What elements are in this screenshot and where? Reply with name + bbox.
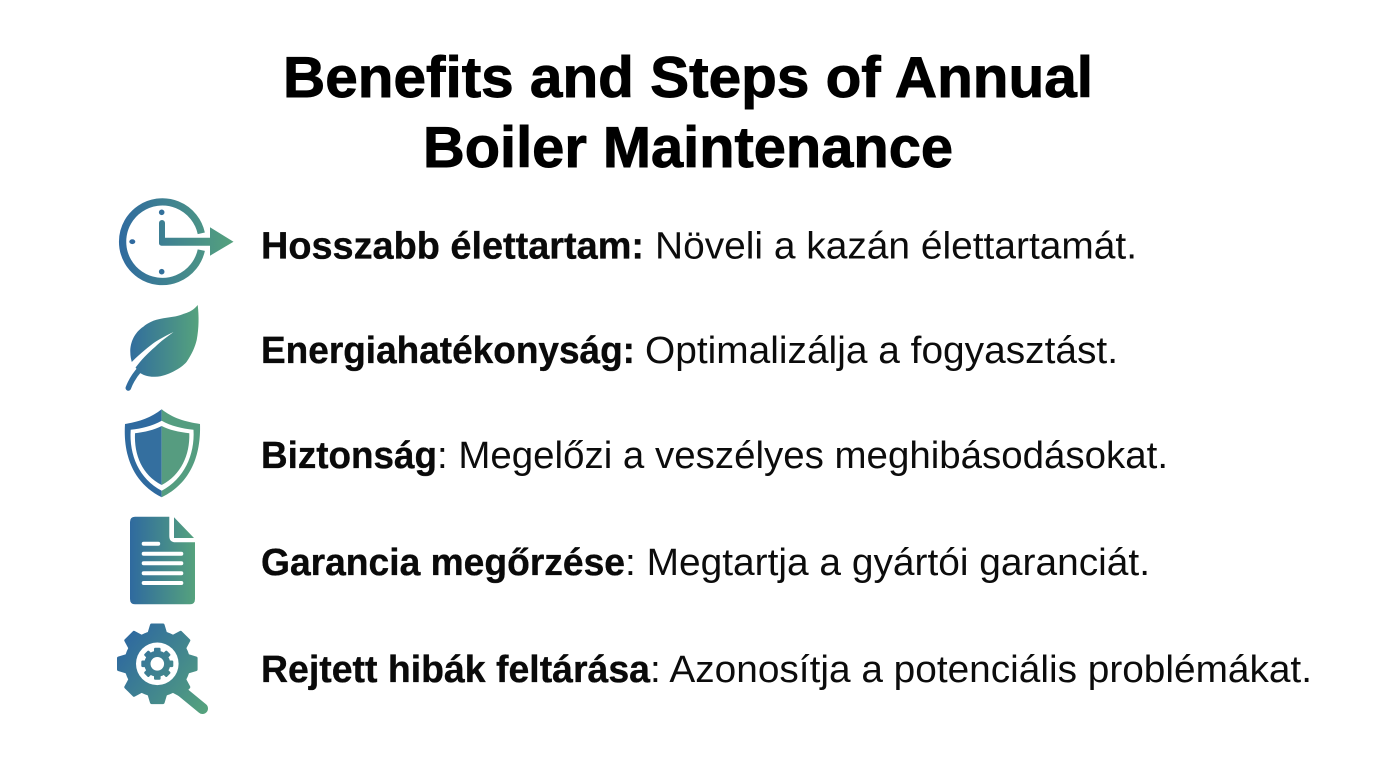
text: safety: Biztonság — [261, 435, 437, 477]
title — [283, 46, 1093, 180]
text: hidden faults: : Azonosítja a potenciális problémákat. — [650, 649, 1312, 691]
icon: clock with arrow — [123, 202, 234, 282]
icon: document — [130, 517, 195, 604]
icon: shield — [125, 409, 200, 497]
text: energy efficiency: Energiahatékonyság: — [261, 330, 635, 372]
text: longer lifespan: Hosszabb élettartam: — [261, 226, 644, 268]
text: energy efficiency: Optimalizálja a fogyasztást. — [645, 330, 1118, 372]
icon: gear with magnifier — [117, 624, 208, 714]
text: safety: : Megelőzi a veszélyes meghibásodásokat. — [437, 435, 1168, 477]
text: hidden faults — [261, 649, 1312, 691]
row: hidden faults — [117, 624, 1308, 714]
text: longer lifespan — [261, 226, 1137, 268]
text: hidden faults: Rejtett hibák feltárása — [261, 649, 651, 691]
text: warranty: Garancia megőrzése — [261, 542, 625, 584]
text: energy efficiency — [261, 330, 1118, 372]
row: longer lifespan — [123, 202, 1137, 282]
row: warranty — [130, 517, 1150, 604]
text: warranty — [261, 542, 1150, 584]
title: Boiler Maintenance — [423, 116, 953, 180]
row: energy efficiency — [128, 305, 1118, 388]
icon: leaf — [128, 305, 199, 388]
row: safety — [125, 409, 1168, 497]
text: longer lifespan: Növeli a kazán élettartamát. — [655, 226, 1137, 268]
text: warranty: : Megtartja a gyártói garanciát. — [625, 542, 1150, 584]
title: Benefits and Steps of Annual — [283, 46, 1093, 110]
